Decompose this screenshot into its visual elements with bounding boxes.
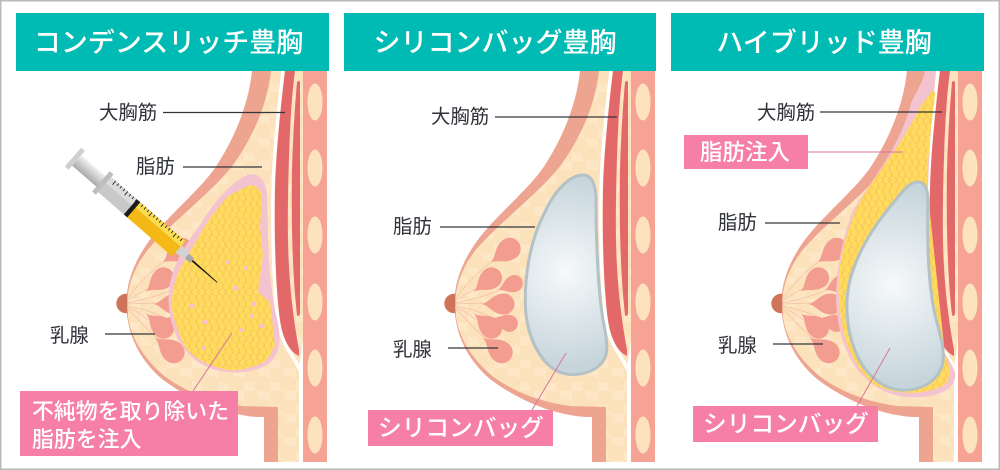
silicone implant <box>847 182 943 390</box>
callout: silicone bag <box>693 348 890 442</box>
panel: silicone bag <box>344 13 656 462</box>
label: pectoralis: 大胸筋 <box>757 102 815 124</box>
icon: syringe <box>64 147 226 292</box>
callout: silicone bag: シリコンバッグ <box>703 411 869 438</box>
panel heading: condense rich <box>16 13 329 71</box>
callout: purified fat injection: 脂肪を注入 <box>32 427 142 452</box>
callout: silicone bag: シリコンバッグ <box>378 415 544 442</box>
callout: purified fat injection: 不純物を取り除いた <box>32 399 229 424</box>
callout: fat injection: 脂肪注入 <box>700 140 790 165</box>
panel heading: hybrid <box>671 13 984 71</box>
label: pectoralis: 大胸筋 <box>431 106 489 128</box>
label: fat <box>136 156 262 178</box>
label: mammary gland <box>393 339 498 361</box>
panel heading: hybrid: ハイブリッド豊胸 <box>716 28 932 58</box>
label: fat: 脂肪 <box>136 156 175 178</box>
callout: silicone bag <box>368 353 566 446</box>
label: mammary gland: 乳腺 <box>718 335 757 357</box>
label: fat: 脂肪 <box>393 216 432 238</box>
breast cross-section diagram <box>116 71 327 462</box>
panel heading: silicone bag: シリコンバッグ豊胸 <box>374 28 616 58</box>
breast cross-section diagram <box>444 71 655 462</box>
label: mammary gland <box>718 335 823 357</box>
panel: condense rich <box>16 13 329 462</box>
breast cross-section diagram <box>771 71 982 462</box>
injected fat layer <box>836 71 955 397</box>
panel heading: silicone bag <box>344 13 656 71</box>
label: mammary gland: 乳腺 <box>393 339 432 361</box>
label: fat <box>718 212 840 234</box>
label: mammary gland <box>50 325 155 347</box>
callout: purified fat injection <box>20 333 238 456</box>
injected fat mass <box>169 174 280 372</box>
label: mammary gland: 乳腺 <box>50 325 89 347</box>
panel heading: condense rich: コンデンスリッチ豊胸 <box>34 28 303 58</box>
callout: fat injection <box>684 135 903 169</box>
silicone implant <box>525 175 607 374</box>
panel: hybrid <box>671 13 984 462</box>
label: fat: 脂肪 <box>718 212 757 234</box>
label: pectoralis: 大胸筋 <box>99 102 157 124</box>
